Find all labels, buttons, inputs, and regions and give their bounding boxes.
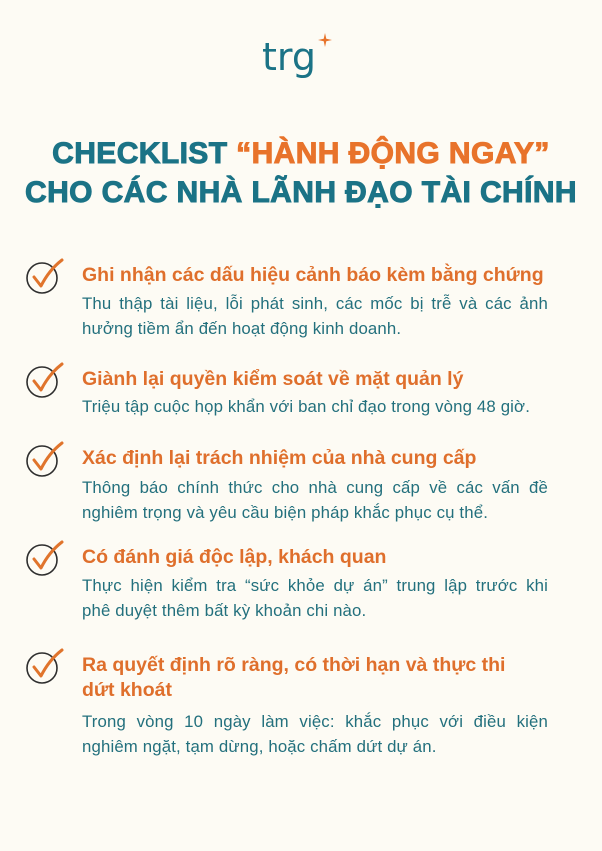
body: Thu thập tài liệu, lỗi phát sinh, các mốc bị trễ và các ảnh hưởng tiềm ẩn đến hoạt động kinh doanh.	[82, 294, 548, 338]
heading: Ra quyết định rõ ràng, có thời hạn và thực thi	[82, 654, 505, 676]
item 5	[26, 648, 548, 756]
title	[25, 136, 577, 209]
icon: check	[26, 258, 64, 294]
item 4	[26, 540, 548, 620]
body: Thông báo chính thức cho nhà cung cấp về các vấn đề nghiêm trọng và yêu cầu biện pháp khắc phục cụ thể.	[82, 478, 548, 522]
body: Triệu tập cuộc họp khẩn với ban chỉ đạo trong vòng 48 giờ.	[82, 397, 530, 416]
icon: check	[26, 648, 64, 684]
icon: check	[26, 540, 64, 576]
icon: check	[26, 362, 64, 398]
logo: trg	[262, 35, 316, 79]
title: CHECKLIST “HÀNH ĐỘNG NGAY”	[52, 137, 550, 170]
body: Thực hiện kiểm tra “sức khỏe dự án” trung lập trước khi	[82, 576, 548, 595]
body: Trong vòng 10 ngày làm việc: khắc phục với điều kiện nghiêm ngặt, tạm dừng, hoặc chấm dứt dự án.	[82, 712, 548, 756]
heading	[82, 654, 505, 701]
body: phê duyệt thêm bất kỳ khoản chi nào.	[82, 600, 366, 620]
item 1	[26, 258, 548, 338]
item 3	[26, 441, 548, 522]
heading: Xác định lại trách nhiệm của nhà cung cấp	[82, 447, 476, 469]
heading: Ghi nhận các dấu hiệu cảnh báo kèm bằng chứng	[82, 264, 544, 286]
heading: Giành lại quyền kiểm soát về mặt quản lý	[82, 368, 463, 390]
heading: Có đánh giá độc lập, khách quan	[82, 546, 386, 568]
title: CHO CÁC NHÀ LÃNH ĐẠO TÀI CHÍNH	[25, 176, 577, 209]
heading: dứt khoát	[82, 679, 172, 701]
icon: check	[26, 441, 64, 477]
icon: sparkle	[318, 33, 332, 47]
item 2	[26, 362, 530, 416]
body	[82, 576, 548, 620]
